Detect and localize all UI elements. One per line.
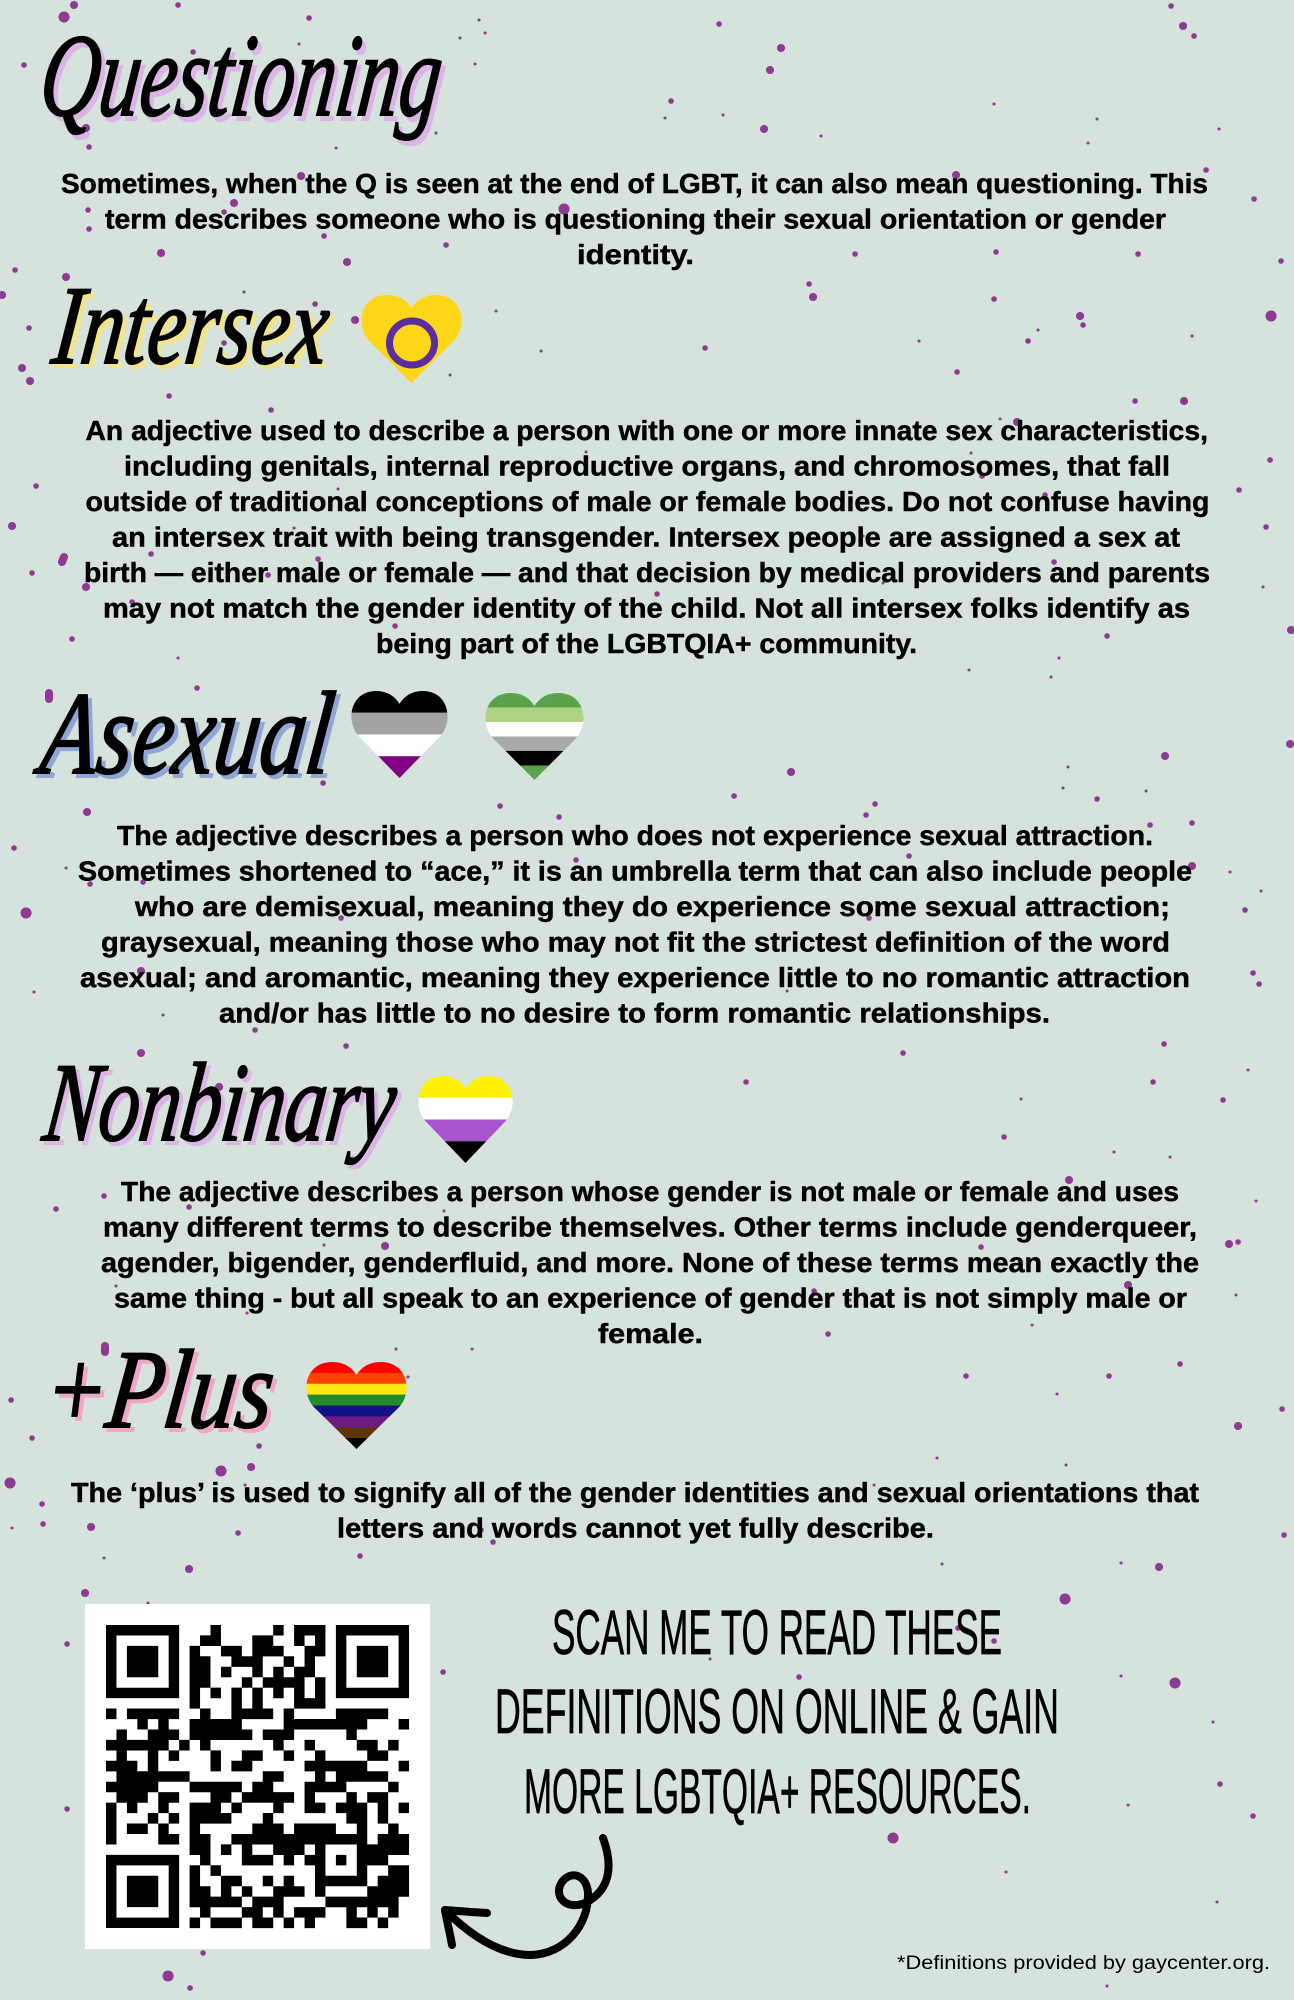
text block: questioning definition: term describes someone who is questioning their sexual orientation or gender xyxy=(105,204,1166,234)
text block: plus definition: letters and words cannot yet fully describe. xyxy=(337,1512,934,1544)
heading: Nonbinary: Nonbinary xyxy=(37,1041,403,1165)
text block: asexual definition: who are demisexual, meaning they do experience some sexual attraction; xyxy=(134,891,1170,922)
text block: asexual definition: The adjective describes a person who does not experience sexual attraction. xyxy=(117,820,1153,851)
icon: progress pride heart xyxy=(306,1362,407,1449)
heading: +Plus: +Plus xyxy=(42,1332,285,1456)
text block: intersex definition: outside of traditional conceptions of male or female bodies. Do not confuse having xyxy=(86,486,1209,517)
icon: asexual flag heart xyxy=(351,691,448,778)
call to action text xyxy=(495,1598,1059,1827)
text block: asexual definition: Sometimes shortened to “ace,” it is an umbrella term that can also include people xyxy=(78,856,1192,886)
text block: intersex definition: may not match the gender identity of the child. Not all intersex folks identify as xyxy=(103,592,1190,624)
heading: Questioning: Questioning xyxy=(34,9,450,141)
text block: intersex definition: including genitals, internal reproductive organs, and chromosomes, that fall xyxy=(124,450,1170,482)
heading: Intersex: Intersex xyxy=(50,268,340,392)
text block: nonbinary definition: agender, bigender, genderfluid, and more. None of these terms mean exactly the xyxy=(101,1247,1199,1278)
text block: intersex definition: birth — either male or female — and that decision by medical providers and parents xyxy=(84,557,1210,588)
text block: questioning definition: Sometimes, when the Q is seen at the end of LGBT, it can also mean questioning. This xyxy=(61,168,1208,199)
text block: plus definition: The ‘plus’ is used to signify all of the gender identities and sexual orientations that xyxy=(71,1477,1199,1508)
text block: asexual definition: and/or has little to no desire to form romantic relationships. xyxy=(219,998,1050,1028)
text block: nonbinary definition: female. xyxy=(598,1318,703,1349)
heading: Questioning: Questioning xyxy=(38,14,454,146)
text block: asexual definition: graysexual, meaning those who may not fit the strictest definition of the word xyxy=(101,926,1170,958)
icon: aromantic flag heart xyxy=(485,693,584,780)
text block: nonbinary definition: same thing - but all speak to an experience of gender that is not simply male or xyxy=(114,1282,1187,1314)
text block: intersex definition xyxy=(84,415,1210,659)
text block: asexual definition: asexual; and aromantic, meaning they experience little to no romantic attraction xyxy=(80,962,1190,993)
icon: nonbinary flag heart xyxy=(418,1076,513,1163)
text block: plus definition xyxy=(71,1477,1199,1544)
heading: Asexual: Asexual xyxy=(33,671,345,803)
heading: Asexual: Asexual xyxy=(29,667,341,799)
text block: intersex definition: being part of the LGBTQIA+ community. xyxy=(376,628,917,659)
text block: nonbinary definition: The adjective describes a person whose gender is not male or female and uses xyxy=(121,1176,1179,1207)
text block: questioning definition: identity. xyxy=(577,239,694,270)
arrow pointing to QR code xyxy=(445,1838,609,1955)
text block: nonbinary definition xyxy=(101,1176,1199,1349)
heading: Questioning xyxy=(34,9,454,146)
text block: asexual definition xyxy=(78,820,1192,1028)
heading: Nonbinary: Nonbinary xyxy=(41,1045,407,1169)
heading: Intersex: Intersex xyxy=(46,264,336,388)
QR code xyxy=(85,1604,430,1949)
text block: nonbinary definition: many different terms to describe themselves. Other terms include genderqueer, xyxy=(103,1212,1197,1242)
text block: intersex definition: An adjective used to describe a person with one or more innate sex characteristics, xyxy=(86,415,1208,446)
heading: +Plus: +Plus xyxy=(38,1328,281,1452)
icon: intersex flag heart xyxy=(361,295,462,383)
text block: intersex definition: an intersex trait with being transgender. Intersex people are assigned a sex at xyxy=(112,522,1180,552)
footnote: *Definitions provided by gaycenter.org. xyxy=(897,1953,1270,1974)
text block: questioning definition xyxy=(61,168,1208,270)
